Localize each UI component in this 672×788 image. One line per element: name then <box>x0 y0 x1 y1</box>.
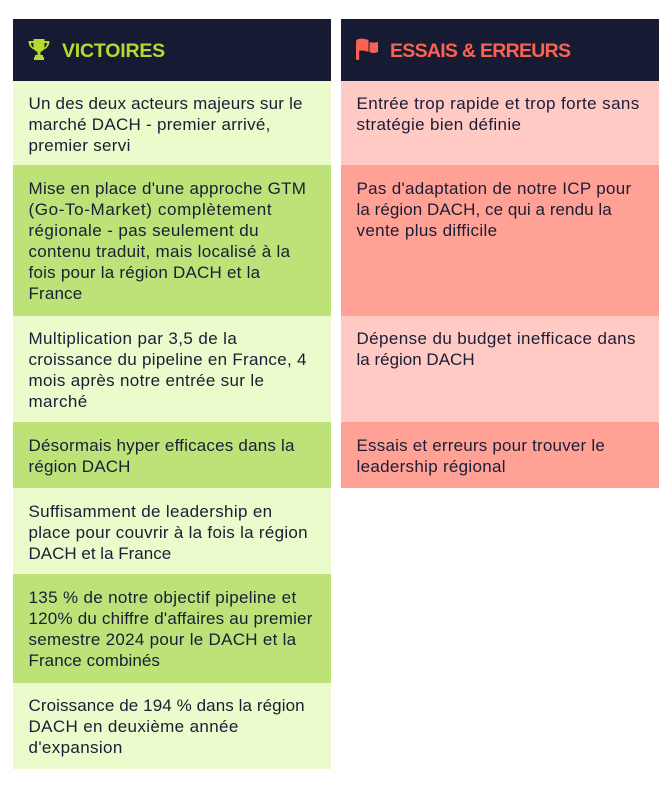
text block: victoire 6: semestre 2024 pour le DACH et la <box>28 630 296 648</box>
text block: victoire 3: marché <box>28 392 88 410</box>
text block: victoire 3 <box>13 316 331 422</box>
text block: victoire 1: Un des deux acteurs majeurs sur le <box>28 94 303 112</box>
text block: victoire 2: régionale - pas seulement du <box>28 220 259 240</box>
text block: erreur 3 <box>341 316 659 422</box>
text block: victoire 2: (Go-To-Market) complètement <box>28 200 272 218</box>
text block: victoire 5: DACH et la France <box>28 544 171 562</box>
text block: erreur 2: la région DACH, ce qui a rendu la <box>356 200 612 218</box>
text block: victoire 6 <box>13 574 331 683</box>
text block: victoire 6: France combinés <box>28 650 160 670</box>
heading: essais et erreurs: ESSAIS & ERREURS <box>390 40 570 62</box>
text block: victoire 3: mois après notre entrée sur le <box>28 370 264 390</box>
text block: victoire 5: place pour couvrir à la fois la région <box>28 522 308 542</box>
text block: victoire 1 <box>13 81 331 165</box>
text block: victoire 2: France <box>28 284 82 302</box>
text block: victoire 6: 120% du chiffre d'affaires au premier <box>28 608 313 628</box>
text block: erreur 3: la région DACH <box>356 350 475 368</box>
text block: victoire 5 <box>13 488 331 574</box>
text block: victoire 3: Multiplication par 3,5 de la <box>28 328 237 348</box>
text block: erreur 4: leadership régional <box>356 456 506 476</box>
panel: essais et erreurs header <box>341 19 659 80</box>
text block: erreur 2 <box>341 165 659 316</box>
text block: erreur 4 <box>341 422 659 488</box>
text block: victoire 2: contenu traduit, mais localisé à la <box>28 242 290 260</box>
text block: victoire 4 <box>13 422 331 488</box>
text block: erreur 2: Pas d'adaptation de notre ICP pour <box>356 178 631 198</box>
text block: victoire 4: Désormais hyper efficaces dans la <box>28 436 295 454</box>
text block: victoire 1: premier servi <box>28 136 131 154</box>
panel: victoires header <box>13 19 331 80</box>
text block: victoire 2: Mise en place d'une approche GTM <box>28 178 306 198</box>
text block: victoire 7: d'expansion <box>28 738 123 756</box>
text block: victoire 2 <box>13 165 331 316</box>
text block: erreur 4: Essais et erreurs pour trouver le <box>356 436 605 454</box>
text block: erreur 3: Dépense du budget inefficace dans <box>356 328 636 348</box>
text block: erreur 2: vente plus difficile <box>356 220 497 240</box>
text block: victoire 6: 135 % de notre objectif pipeline et <box>28 588 297 606</box>
text block: erreur 1: Entrée trop rapide et trop forte sans <box>356 94 640 112</box>
text block: victoire 1: marché DACH - premier arrivé, <box>28 114 271 134</box>
text block: victoire 2: fois pour la région DACH et la <box>28 262 260 282</box>
text block: victoire 7: Croissance de 194 % dans la région <box>28 696 305 714</box>
text block: victoire 7 <box>13 683 331 769</box>
heading: victoires: VICTOIRES <box>62 40 165 62</box>
text block: victoire 5: Suffisamment de leadership en <box>28 502 272 520</box>
text block: victoire 4: région DACH <box>28 456 131 476</box>
icon: trophy <box>28 39 50 60</box>
text block: victoire 7: DACH en deuxième année <box>28 716 239 736</box>
text block: erreur 1 <box>341 81 659 165</box>
icon: flag <box>356 38 378 60</box>
text block: erreur 1: stratégie bien définie <box>356 114 521 134</box>
text block: victoire 3: croissance du pipeline en France, 4 <box>28 350 307 368</box>
